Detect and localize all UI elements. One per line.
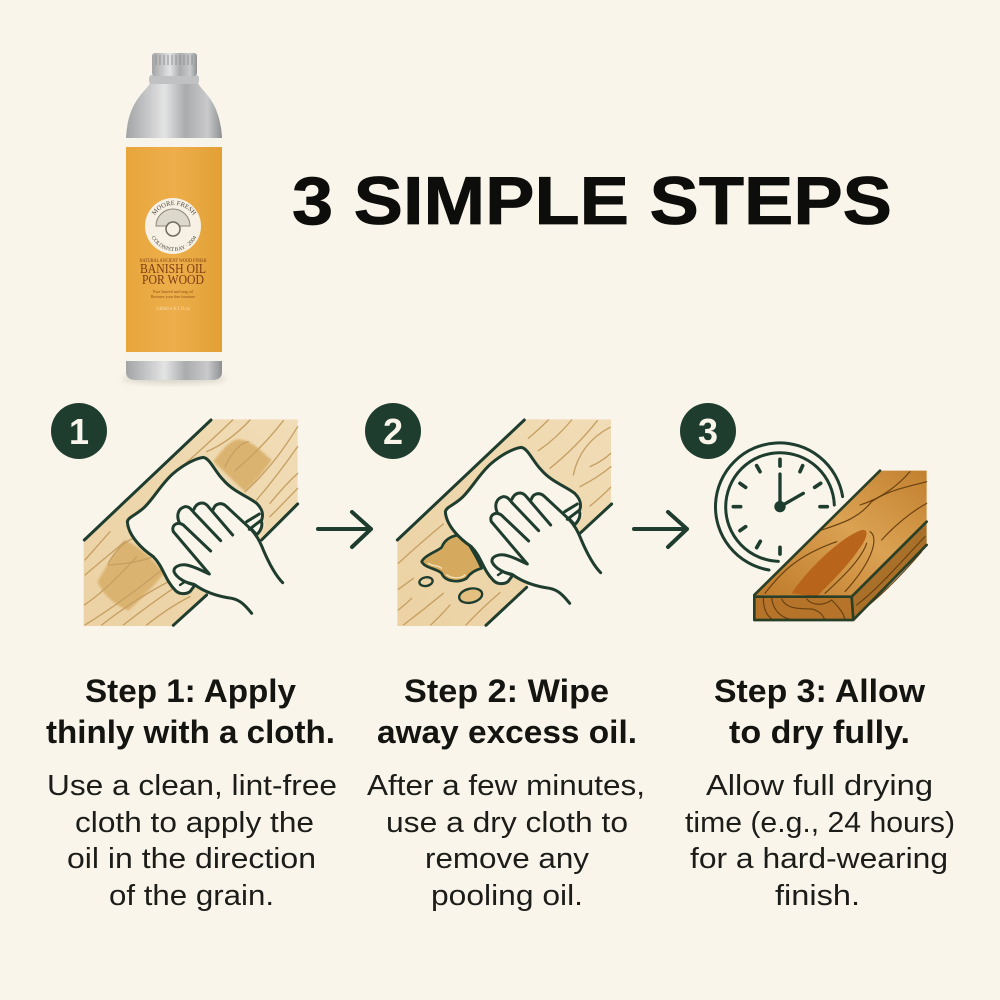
bottle label text: 240ml e 8.1 fl.oz (156, 307, 191, 312)
wood plank (84, 419, 298, 626)
step 1 heading: thinly with a cloth. (46, 714, 335, 750)
step 3 number badge: 3 (698, 411, 718, 452)
step 2 body: After a few minutes, (367, 770, 645, 802)
cloth and hand (127, 457, 283, 613)
step 2 number badge (365, 403, 421, 459)
step 1 body: oil in the direction (67, 843, 316, 875)
bottle label text (140, 258, 207, 312)
step 3 heading: to dry fully. (729, 714, 910, 750)
arrow 2 (634, 512, 687, 547)
step 1 number badge (51, 403, 107, 459)
step 1 heading: Step 1: Apply (85, 673, 296, 709)
product bottle (123, 53, 225, 386)
step 1 body: cloth to apply the (75, 807, 314, 839)
step 2 body: use a dry cloth to (386, 807, 628, 839)
step 3 number badge (680, 403, 736, 459)
step 2 body (367, 770, 645, 912)
step 2 heading: away excess oil. (377, 714, 637, 750)
step 3 body: Allow full drying (706, 770, 933, 802)
step 1 body (47, 770, 337, 912)
step 3 heading (714, 673, 925, 750)
step 3 heading: Step 3: Allow (714, 673, 925, 709)
step 2 heading (377, 673, 637, 750)
bottle label text: BANISH OIL (140, 262, 206, 277)
step 2 number badge: 2 (383, 411, 403, 452)
step 1 illustration: cloth on wood (84, 419, 298, 626)
bottle label text: NATURAL ANCIENT WOOD FINISH (140, 258, 207, 264)
cloth and hand (445, 447, 601, 603)
bottle label seal: MOORE FRESH (152, 200, 196, 216)
bottle label seal: COLONIST BAY · 2004 (152, 236, 196, 251)
step 2 body: remove any (425, 843, 590, 875)
step 2 body: pooling oil. (431, 880, 583, 912)
arrow 1 (318, 512, 371, 547)
bottle label seal (145, 198, 201, 254)
step 1 body: Use a clean, lint-free (47, 770, 337, 802)
step 3 illustration: clock and wood (715, 443, 927, 621)
step 2 heading: Step 2: Wipe (404, 673, 609, 709)
step 1 number badge: 1 (69, 411, 89, 452)
bottle label text: POR WOOD (142, 273, 204, 288)
bottle label text: Pure linseed and tung oil (153, 289, 194, 294)
step 1 heading (46, 673, 335, 750)
step 1 body: of the grain. (109, 880, 274, 912)
bottle label text: Restores your fine furniture (151, 294, 195, 299)
title: 3 SIMPLE STEPS (292, 163, 892, 239)
oil puddle and drops (419, 535, 484, 605)
wood plank (397, 419, 612, 626)
step 2 illustration: wiping excess oil (397, 419, 612, 626)
wooden plank (754, 471, 927, 621)
step 3 body: finish. (775, 880, 860, 912)
step 3 body: for a hard-wearing (690, 843, 948, 875)
step 3 body (685, 770, 955, 912)
clock (715, 443, 843, 570)
step 3 body: time (e.g., 24 hours) (685, 807, 955, 839)
